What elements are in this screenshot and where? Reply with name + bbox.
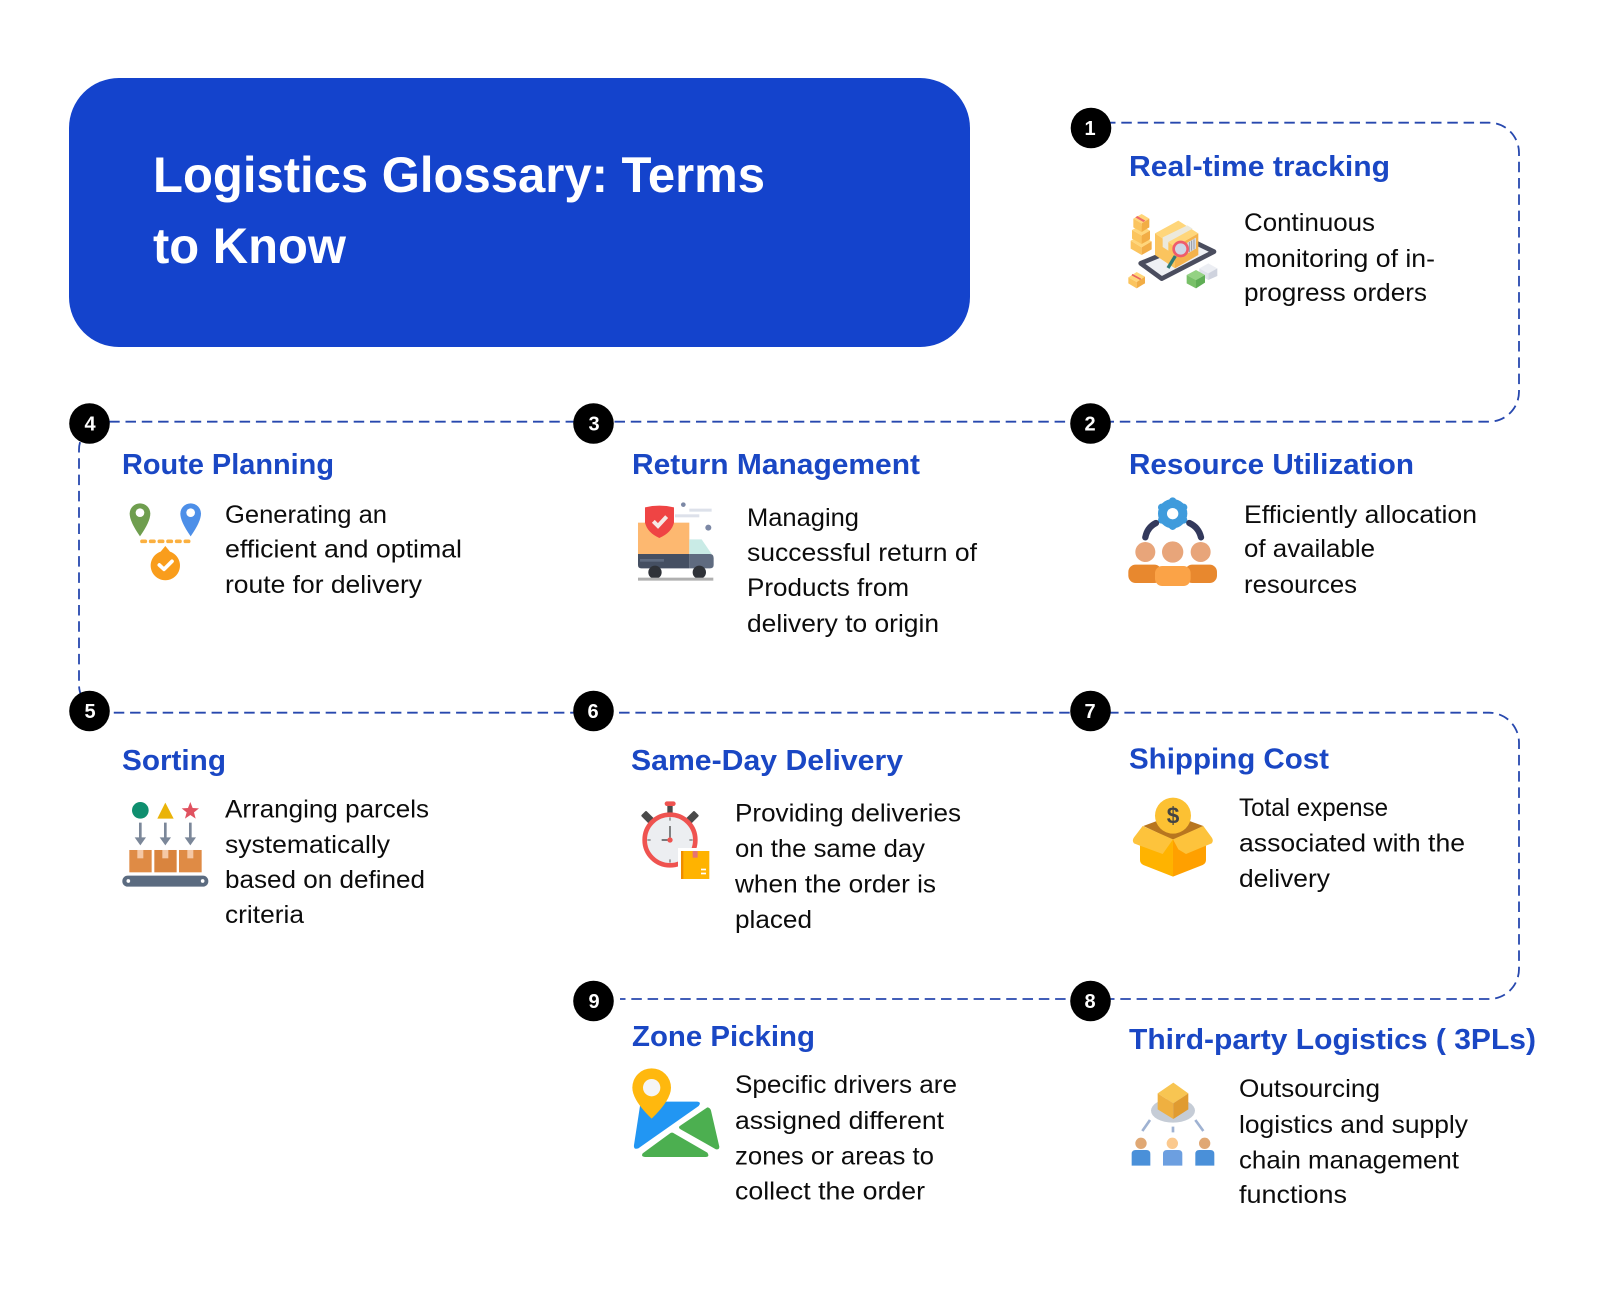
description: collect the order — [735, 1178, 925, 1206]
heading: Shipping Cost — [1129, 744, 1330, 776]
badge 8 — [1070, 981, 1111, 1021]
description: Total expense — [1239, 794, 1388, 822]
title banner: Logistics Glossary: Terms — [153, 147, 765, 203]
badge 7 — [1070, 691, 1111, 731]
description: Providing deliveries — [735, 800, 961, 828]
description — [734, 800, 961, 934]
description: monitoring of in- — [1244, 245, 1435, 273]
panel: third-party logistics — [1070, 981, 1536, 1209]
badge 5 — [69, 691, 110, 731]
description: successful return of — [747, 539, 977, 567]
heading: Zone Picking — [632, 1021, 815, 1053]
description: Specific drivers are — [735, 1071, 957, 1099]
description: efficient and optimal — [225, 536, 462, 564]
badge 1 — [1071, 108, 1111, 148]
badge 2: 2 — [1084, 414, 1096, 436]
description: Generating an — [225, 501, 387, 529]
description: progress orders — [1244, 279, 1427, 307]
description — [225, 796, 429, 929]
icon: box with dollar coin: $ — [1167, 803, 1180, 829]
description: resources — [1244, 571, 1357, 599]
description — [735, 1071, 957, 1206]
description: Efficiently allocation — [1244, 501, 1477, 529]
description — [1244, 209, 1435, 307]
icon: sorting conveyor — [122, 802, 208, 887]
badge 4: 4 — [84, 414, 96, 436]
heading: Sorting — [122, 745, 226, 777]
description: zones or areas to — [735, 1142, 934, 1170]
description: Managing — [747, 504, 859, 532]
heading: Same-Day Delivery — [631, 745, 903, 777]
heading: Resource Utilization — [1129, 449, 1414, 481]
description: chain management — [1239, 1146, 1459, 1174]
panel: sorting — [69, 691, 429, 929]
description — [225, 501, 462, 599]
badge 1: 1 — [1084, 118, 1096, 140]
panel: zone picking — [573, 981, 957, 1206]
heading: Real-time tracking — [1129, 151, 1390, 183]
icon: stopwatch with parcel — [641, 801, 713, 883]
description: placed — [735, 906, 812, 934]
description — [1244, 501, 1477, 599]
icon: map pins and route — [130, 503, 201, 580]
badge 2 — [1070, 403, 1111, 444]
badge 8: 8 — [1084, 991, 1096, 1013]
description: assigned different — [735, 1107, 944, 1135]
icon: delivery truck with shield — [638, 502, 714, 581]
panel: same-day delivery — [573, 691, 961, 934]
badge 3 — [573, 403, 614, 444]
icon: parcels on tablet with magnifier — [1128, 214, 1217, 288]
description: criteria — [225, 901, 304, 929]
panel: return management — [573, 403, 977, 638]
description — [1239, 1075, 1469, 1209]
description: route for delivery — [225, 571, 423, 599]
panel: resource utilization — [1070, 403, 1477, 599]
description: Products from — [747, 574, 909, 602]
description: Arranging parcels — [225, 796, 429, 824]
dashed connector path — [79, 123, 1519, 999]
description: functions — [1239, 1181, 1347, 1209]
badge 4 — [69, 403, 110, 444]
panel: route planning — [69, 403, 462, 599]
description: logistics and supply — [1239, 1111, 1469, 1139]
badge 6 — [573, 691, 614, 731]
badge 7: 7 — [1084, 701, 1096, 723]
title banner: to Know — [153, 218, 346, 274]
badge 9 — [573, 981, 614, 1021]
description: associated with the — [1239, 830, 1465, 858]
panel: real-time tracking — [1071, 108, 1435, 307]
icon: box with dollar coin — [1133, 798, 1213, 877]
description: Outsourcing — [1239, 1075, 1380, 1103]
description: when the order is — [734, 870, 936, 898]
badge 9: 9 — [588, 991, 600, 1013]
description — [1239, 794, 1465, 893]
badge 5: 5 — [84, 701, 96, 723]
description: delivery to origin — [747, 610, 939, 638]
description: of available — [1244, 535, 1375, 563]
description: systematically — [225, 831, 391, 859]
badge 3: 3 — [588, 414, 600, 436]
description — [747, 504, 977, 638]
description: Continuous — [1244, 209, 1375, 237]
heading: Third-party Logistics ( 3PLs) — [1129, 1024, 1536, 1056]
description: based on defined — [225, 866, 425, 894]
icon: map with location pin — [632, 1068, 719, 1157]
heading: Route Planning — [122, 449, 334, 481]
heading: Return Management — [632, 449, 921, 481]
icon: distribution to people — [1132, 1083, 1214, 1166]
icon: team with gear — [1128, 497, 1217, 586]
description: on the same day — [735, 835, 926, 863]
panel: shipping cost — [1070, 691, 1465, 893]
title banner — [69, 78, 970, 347]
badge 6: 6 — [587, 701, 599, 723]
description: delivery — [1239, 865, 1331, 893]
